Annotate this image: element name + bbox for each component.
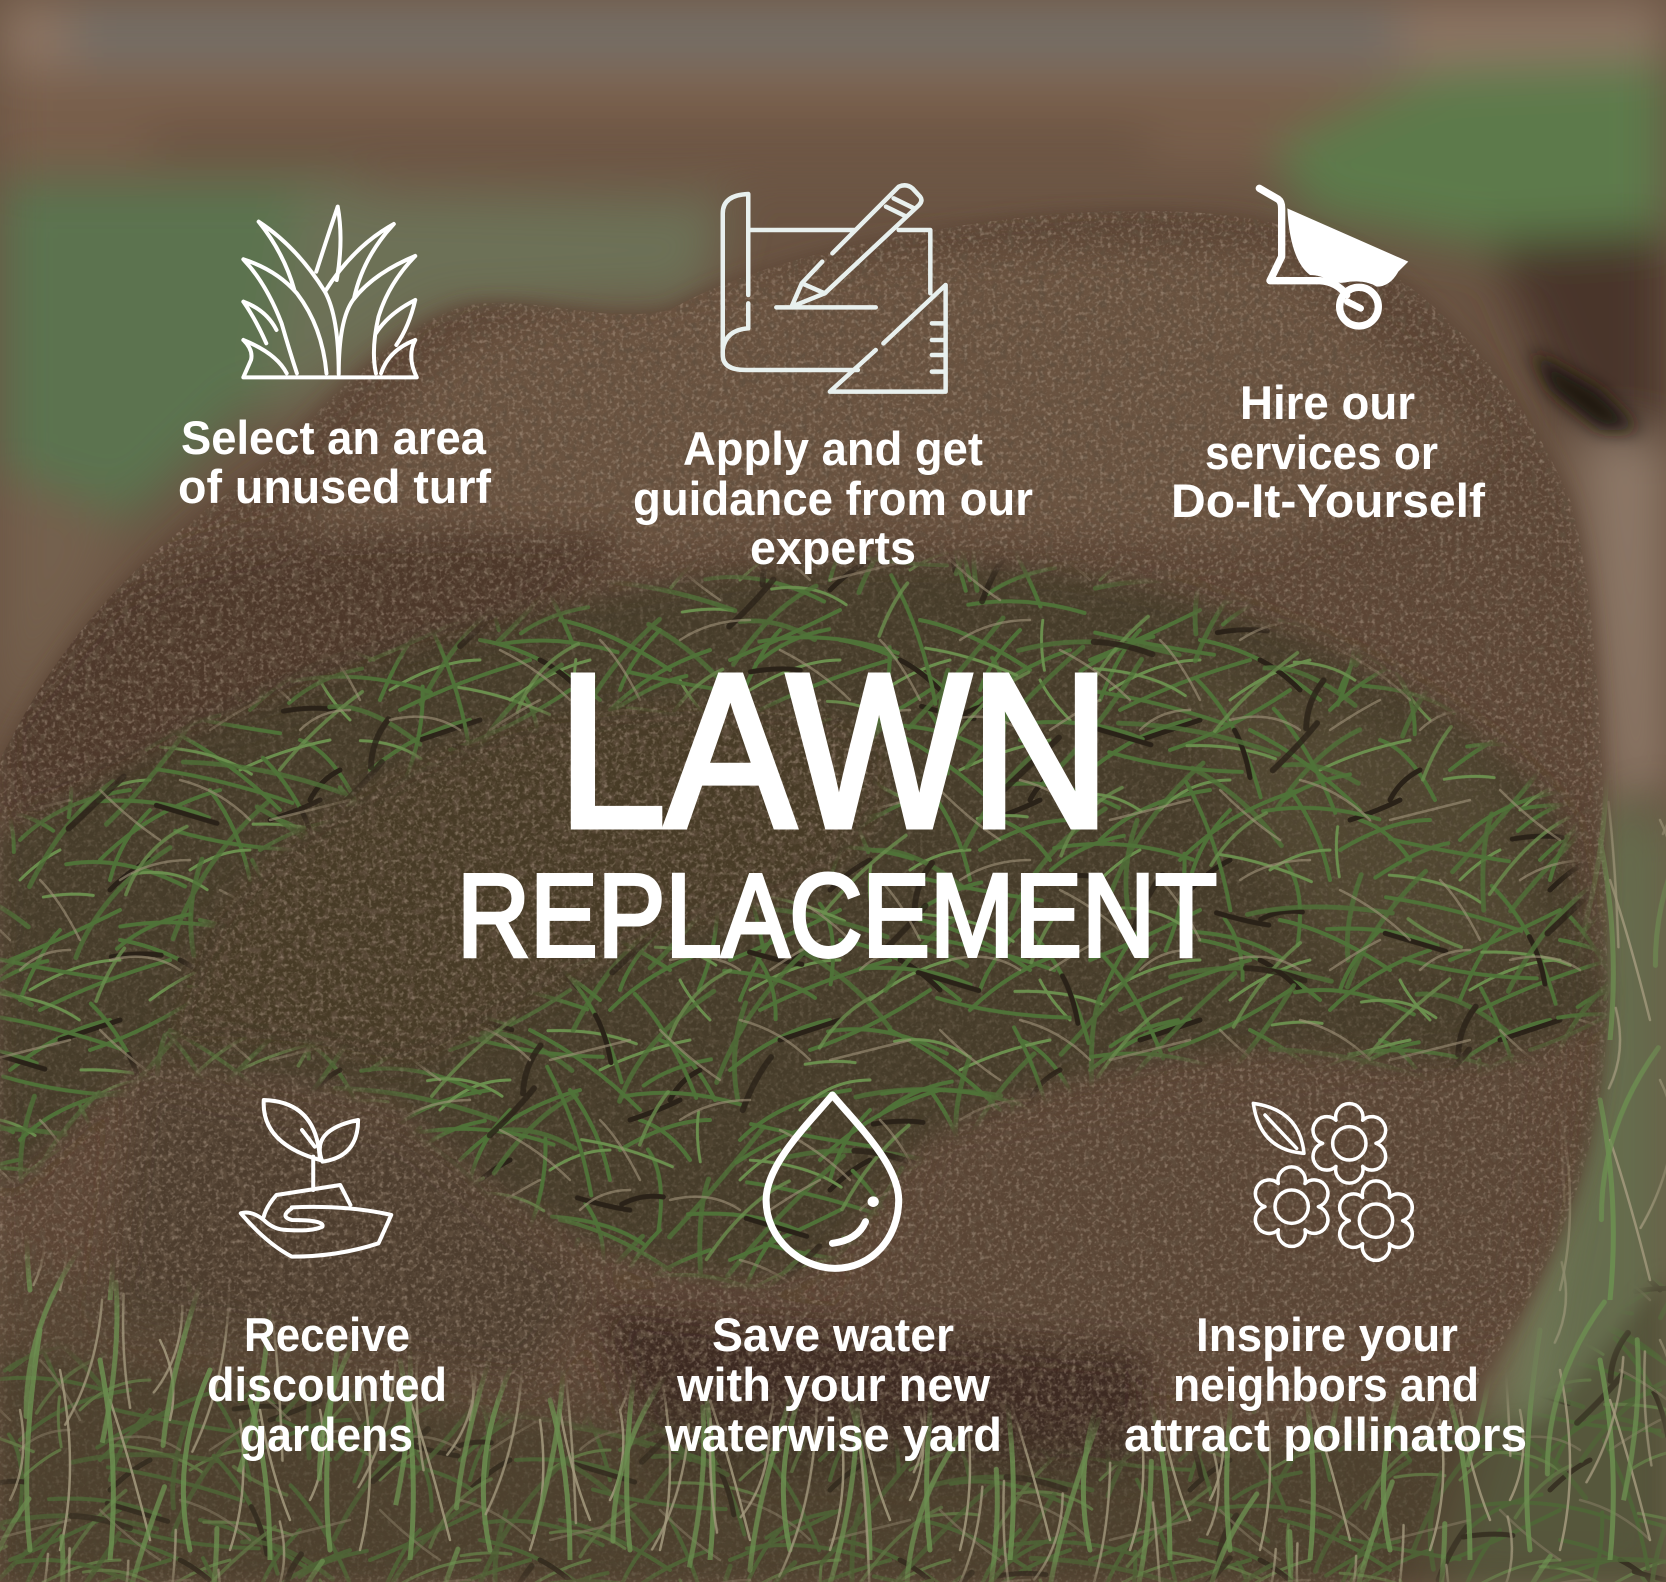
text: apply and get guidance: experts xyxy=(750,521,916,574)
icon: hand holding seedling xyxy=(241,1100,391,1257)
text: save water: with your new xyxy=(676,1358,990,1411)
text: inspire your neighbors: neighbors and xyxy=(1173,1358,1479,1411)
text: receive discounted gardens: Receive xyxy=(244,1308,410,1361)
text: apply and get guidance: guidance from our xyxy=(633,472,1033,525)
step: apply and get guidance xyxy=(633,185,1033,574)
icon: blueprint, pencil and set square xyxy=(723,185,946,392)
text: save water: waterwise yard xyxy=(664,1408,1002,1461)
heading: LAWN: LAWN xyxy=(558,630,1110,873)
text: receive discounted gardens: discounted xyxy=(207,1358,447,1411)
text: apply and get guidance: Apply and get xyxy=(683,422,983,475)
icon: water drop xyxy=(766,1095,899,1268)
text: inspire your neighbors: Inspire your xyxy=(1196,1308,1458,1361)
step: hire our services xyxy=(1171,188,1485,527)
text: save water: Save water xyxy=(712,1308,954,1361)
step: receive discounted gardens xyxy=(207,1100,447,1461)
text: select an area: of unused turf xyxy=(178,460,491,513)
step: inspire your neighbors xyxy=(1124,1103,1527,1461)
text: receive discounted gardens: gardens xyxy=(240,1408,413,1461)
icon: grass tuft xyxy=(243,207,417,377)
text: select an area: Select an area xyxy=(181,411,487,464)
text: inspire your neighbors: attract pollinators xyxy=(1124,1408,1527,1461)
step: save water xyxy=(664,1095,1002,1461)
subheading: REPLACEMENT: REPLACEMENT xyxy=(457,850,1217,982)
text: hire our services: Do-It-Yourself xyxy=(1171,474,1485,527)
icon: flowers and leaf xyxy=(1253,1103,1412,1260)
step: select an area of unused turf xyxy=(178,207,491,513)
title: LAWN REPLACEMENT xyxy=(457,630,1217,982)
text: hire our services: Hire our xyxy=(1240,376,1415,429)
text: hire our services: services or xyxy=(1205,426,1438,479)
icon: wheelbarrow xyxy=(1259,188,1408,326)
